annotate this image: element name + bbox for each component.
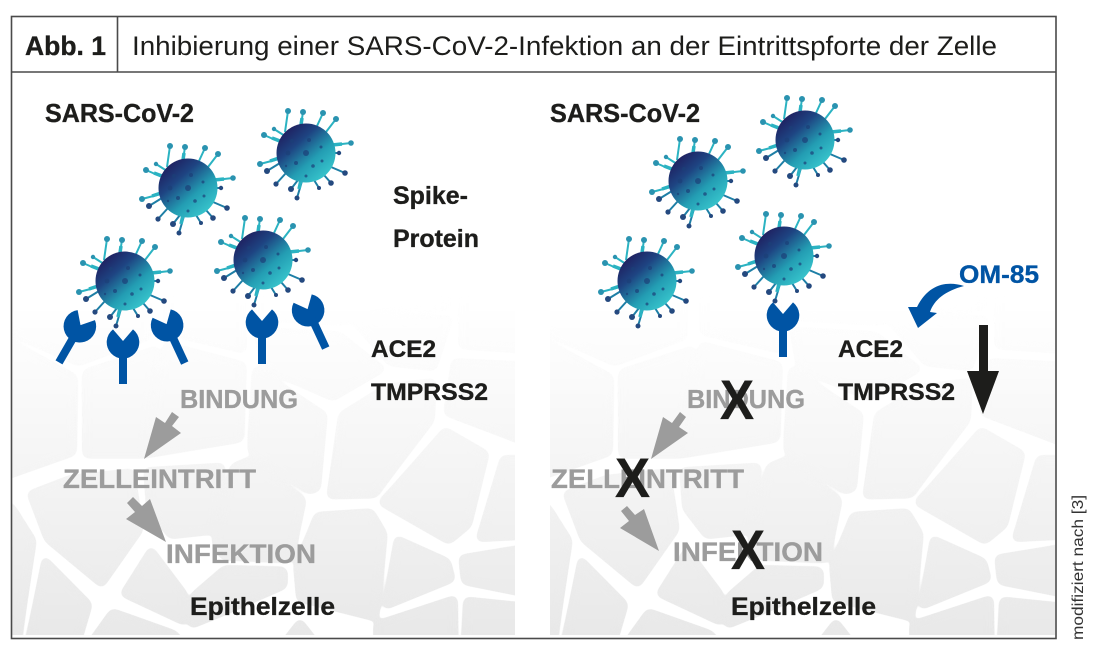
label: OM-85: OM-85 [959,261,1039,289]
source note: modifiziert nach [3] [1070,495,1087,640]
step: Infektion left: INFEKTION [166,539,316,569]
figure number: Abb. 1 [25,31,106,61]
cross: Infektion blocked: X [731,518,765,581]
label: TMPRSS2 left: TMPRSS2 [371,379,488,406]
receptors left [45,292,341,384]
label: spike protein: Spike- [393,182,468,210]
arrow: OM-85 curved [908,284,964,328]
label: SARS-CoV-2 left: SARS-CoV-2 [45,98,194,128]
label: spike protein: Protein [393,225,479,253]
arrow: downregulation [967,325,999,414]
step: Bindung left: BINDUNG [180,384,298,414]
step: Infektion right: INFEKTION [673,537,823,567]
arrow: binding to entry left [144,412,181,459]
step: Zelleintritt left: ZELLEINTRITT [63,464,257,494]
panel: right cell background [550,396,1055,635]
cross: Bindung blocked: X [720,368,754,431]
label: TMPRSS2 right: TMPRSS2 [838,379,955,406]
label: ACE2 right: ACE2 [838,336,903,363]
label: spike protein [393,182,479,253]
receptor right [767,302,799,357]
arrow: entry to infection left [126,497,166,542]
label: Epithelzelle right: Epithelzelle [731,593,876,621]
title: Inhibierung einer SARS-CoV-2-Infektion an der Eintrittspforte der Zelle [132,31,997,61]
label: ACE2 left: ACE2 [371,336,436,363]
label: SARS-CoV-2 right: SARS-CoV-2 [550,98,700,128]
label: Epithelzelle left: Epithelzelle [190,593,335,621]
step: Bindung right: BINDUNG [687,384,805,414]
arrow: entry to infection right [620,506,659,551]
arrow: binding to entry right [651,412,688,459]
panel: left cell background [12,396,515,635]
cross: Zelleintritt blocked: X [615,446,650,509]
viruses left [76,108,354,328]
step: Zelleintritt right: ZELLEINTRITT [551,464,745,494]
viruses right [598,95,853,328]
